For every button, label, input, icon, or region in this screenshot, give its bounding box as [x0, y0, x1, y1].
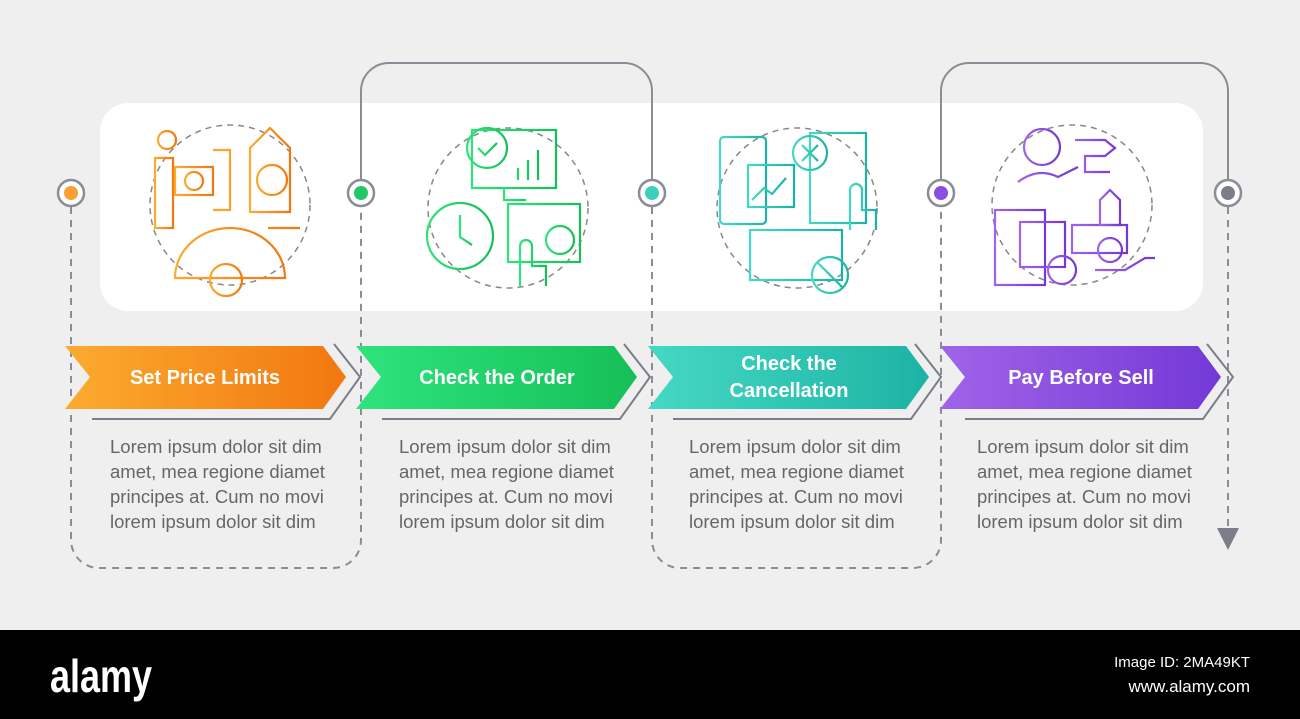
chevron: check the order: Check the Order: [419, 367, 575, 389]
footer bar: alamy: [50, 650, 152, 702]
text blocks: [110, 436, 1192, 532]
footer bar: Image ID: 2MA49KT: [1114, 654, 1250, 671]
footer bar: [0, 630, 1300, 719]
text blocks: principes at. Cum no movi: [399, 486, 613, 507]
white panel: [100, 103, 1203, 311]
chevron: pay before sell: [940, 346, 1221, 409]
chevron: pay before sell: Pay Before Sell: [1008, 367, 1154, 389]
text blocks: lorem ipsum dolor sit dim: [110, 511, 316, 532]
footer bar: www.alamy.com: [1127, 677, 1250, 696]
chevron outlines: [92, 344, 1233, 419]
text blocks: Lorem ipsum dolor sit dim: [110, 436, 322, 457]
icon: check order: [427, 128, 588, 288]
step circles: [58, 180, 1241, 206]
chevron: check the cancellation: [648, 346, 929, 409]
text blocks: principes at. Cum no movi: [689, 486, 903, 507]
text blocks: amet, mea regione diamet: [689, 461, 904, 482]
text blocks: lorem ipsum dolor sit dim: [977, 511, 1183, 532]
chevron: set price limits: [65, 346, 346, 409]
text blocks: principes at. Cum no movi: [977, 486, 1191, 507]
arrow end: [1217, 528, 1239, 550]
text blocks: Lorem ipsum dolor sit dim: [977, 436, 1189, 457]
text blocks: Lorem ipsum dolor sit dim: [689, 436, 901, 457]
chevron: check the order: [356, 346, 637, 409]
icon: pay before sell: [992, 125, 1155, 285]
chevron: check the cancellation: Cancellation: [730, 380, 848, 402]
text blocks: lorem ipsum dolor sit dim: [689, 511, 895, 532]
chevron: check the cancellation: Check the: [741, 353, 837, 375]
chevron: set price limits: Set Price Limits: [130, 367, 280, 389]
text blocks: amet, mea regione diamet: [977, 461, 1192, 482]
text blocks: lorem ipsum dolor sit dim: [399, 511, 605, 532]
text blocks: Lorem ipsum dolor sit dim: [399, 436, 611, 457]
connector path: [71, 63, 1228, 568]
text blocks: amet, mea regione diamet: [110, 461, 325, 482]
icon: cancellation: [717, 128, 877, 293]
icon: price limits: [150, 125, 310, 296]
text blocks: amet, mea regione diamet: [399, 461, 614, 482]
text blocks: principes at. Cum no movi: [110, 486, 324, 507]
